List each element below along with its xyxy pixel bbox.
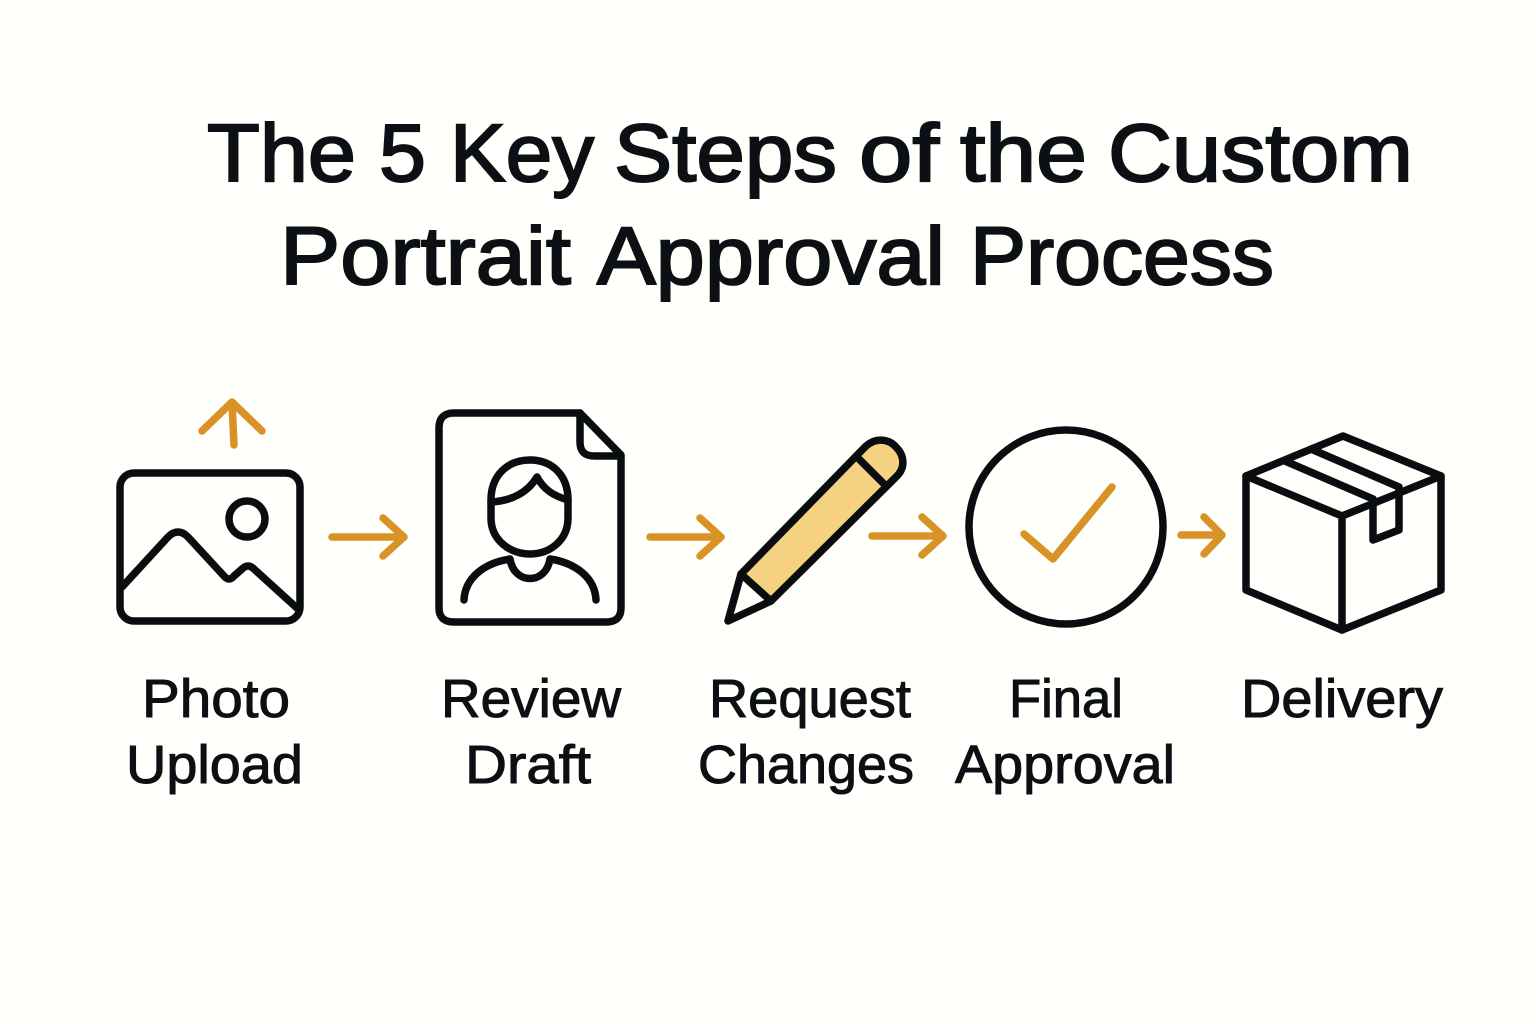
label: final approval [955,669,1175,795]
icon: portrait document [439,413,621,622]
title: 5 [379,108,426,199]
title: Process [970,211,1274,302]
step 1: photo upload [120,402,303,795]
icon: check circle [969,430,1163,624]
title: Portrait [280,211,571,302]
step 3: request changes [698,440,914,795]
title: Steps [614,108,837,199]
label: final approval: Approval [955,735,1175,795]
icon: upload arrow [202,402,262,445]
label: request changes: Request [709,669,911,729]
label: photo upload: Photo [142,669,290,729]
label: delivery: Delivery [1241,669,1443,729]
label: review draft [441,669,622,795]
title: The [207,108,356,199]
title: Custom [1108,108,1413,199]
icon: photo [120,473,300,621]
label: request changes [698,669,914,795]
label: review draft: Draft [465,735,591,795]
label: review draft: Review [441,669,622,729]
title: Approval [597,211,945,302]
step 4: final approval [955,430,1175,795]
arrow 4 to 5 [1181,517,1222,554]
title: of [859,108,939,199]
title: the [960,108,1087,199]
step 5: delivery [1241,436,1443,729]
arrow 2 to 3 [650,518,721,556]
icon: box [1246,436,1441,630]
arrow 3 to 4 [872,517,943,555]
label: final approval: Final [1009,669,1123,729]
step 2: review draft [439,413,622,795]
arrow 1 to 2 [332,518,404,556]
title [207,108,1413,302]
label: photo upload [126,669,303,795]
icon: pencil [728,440,903,621]
label: photo upload: Upload [126,735,303,795]
label: request changes: Changes [698,735,914,795]
title: Key [450,108,594,199]
